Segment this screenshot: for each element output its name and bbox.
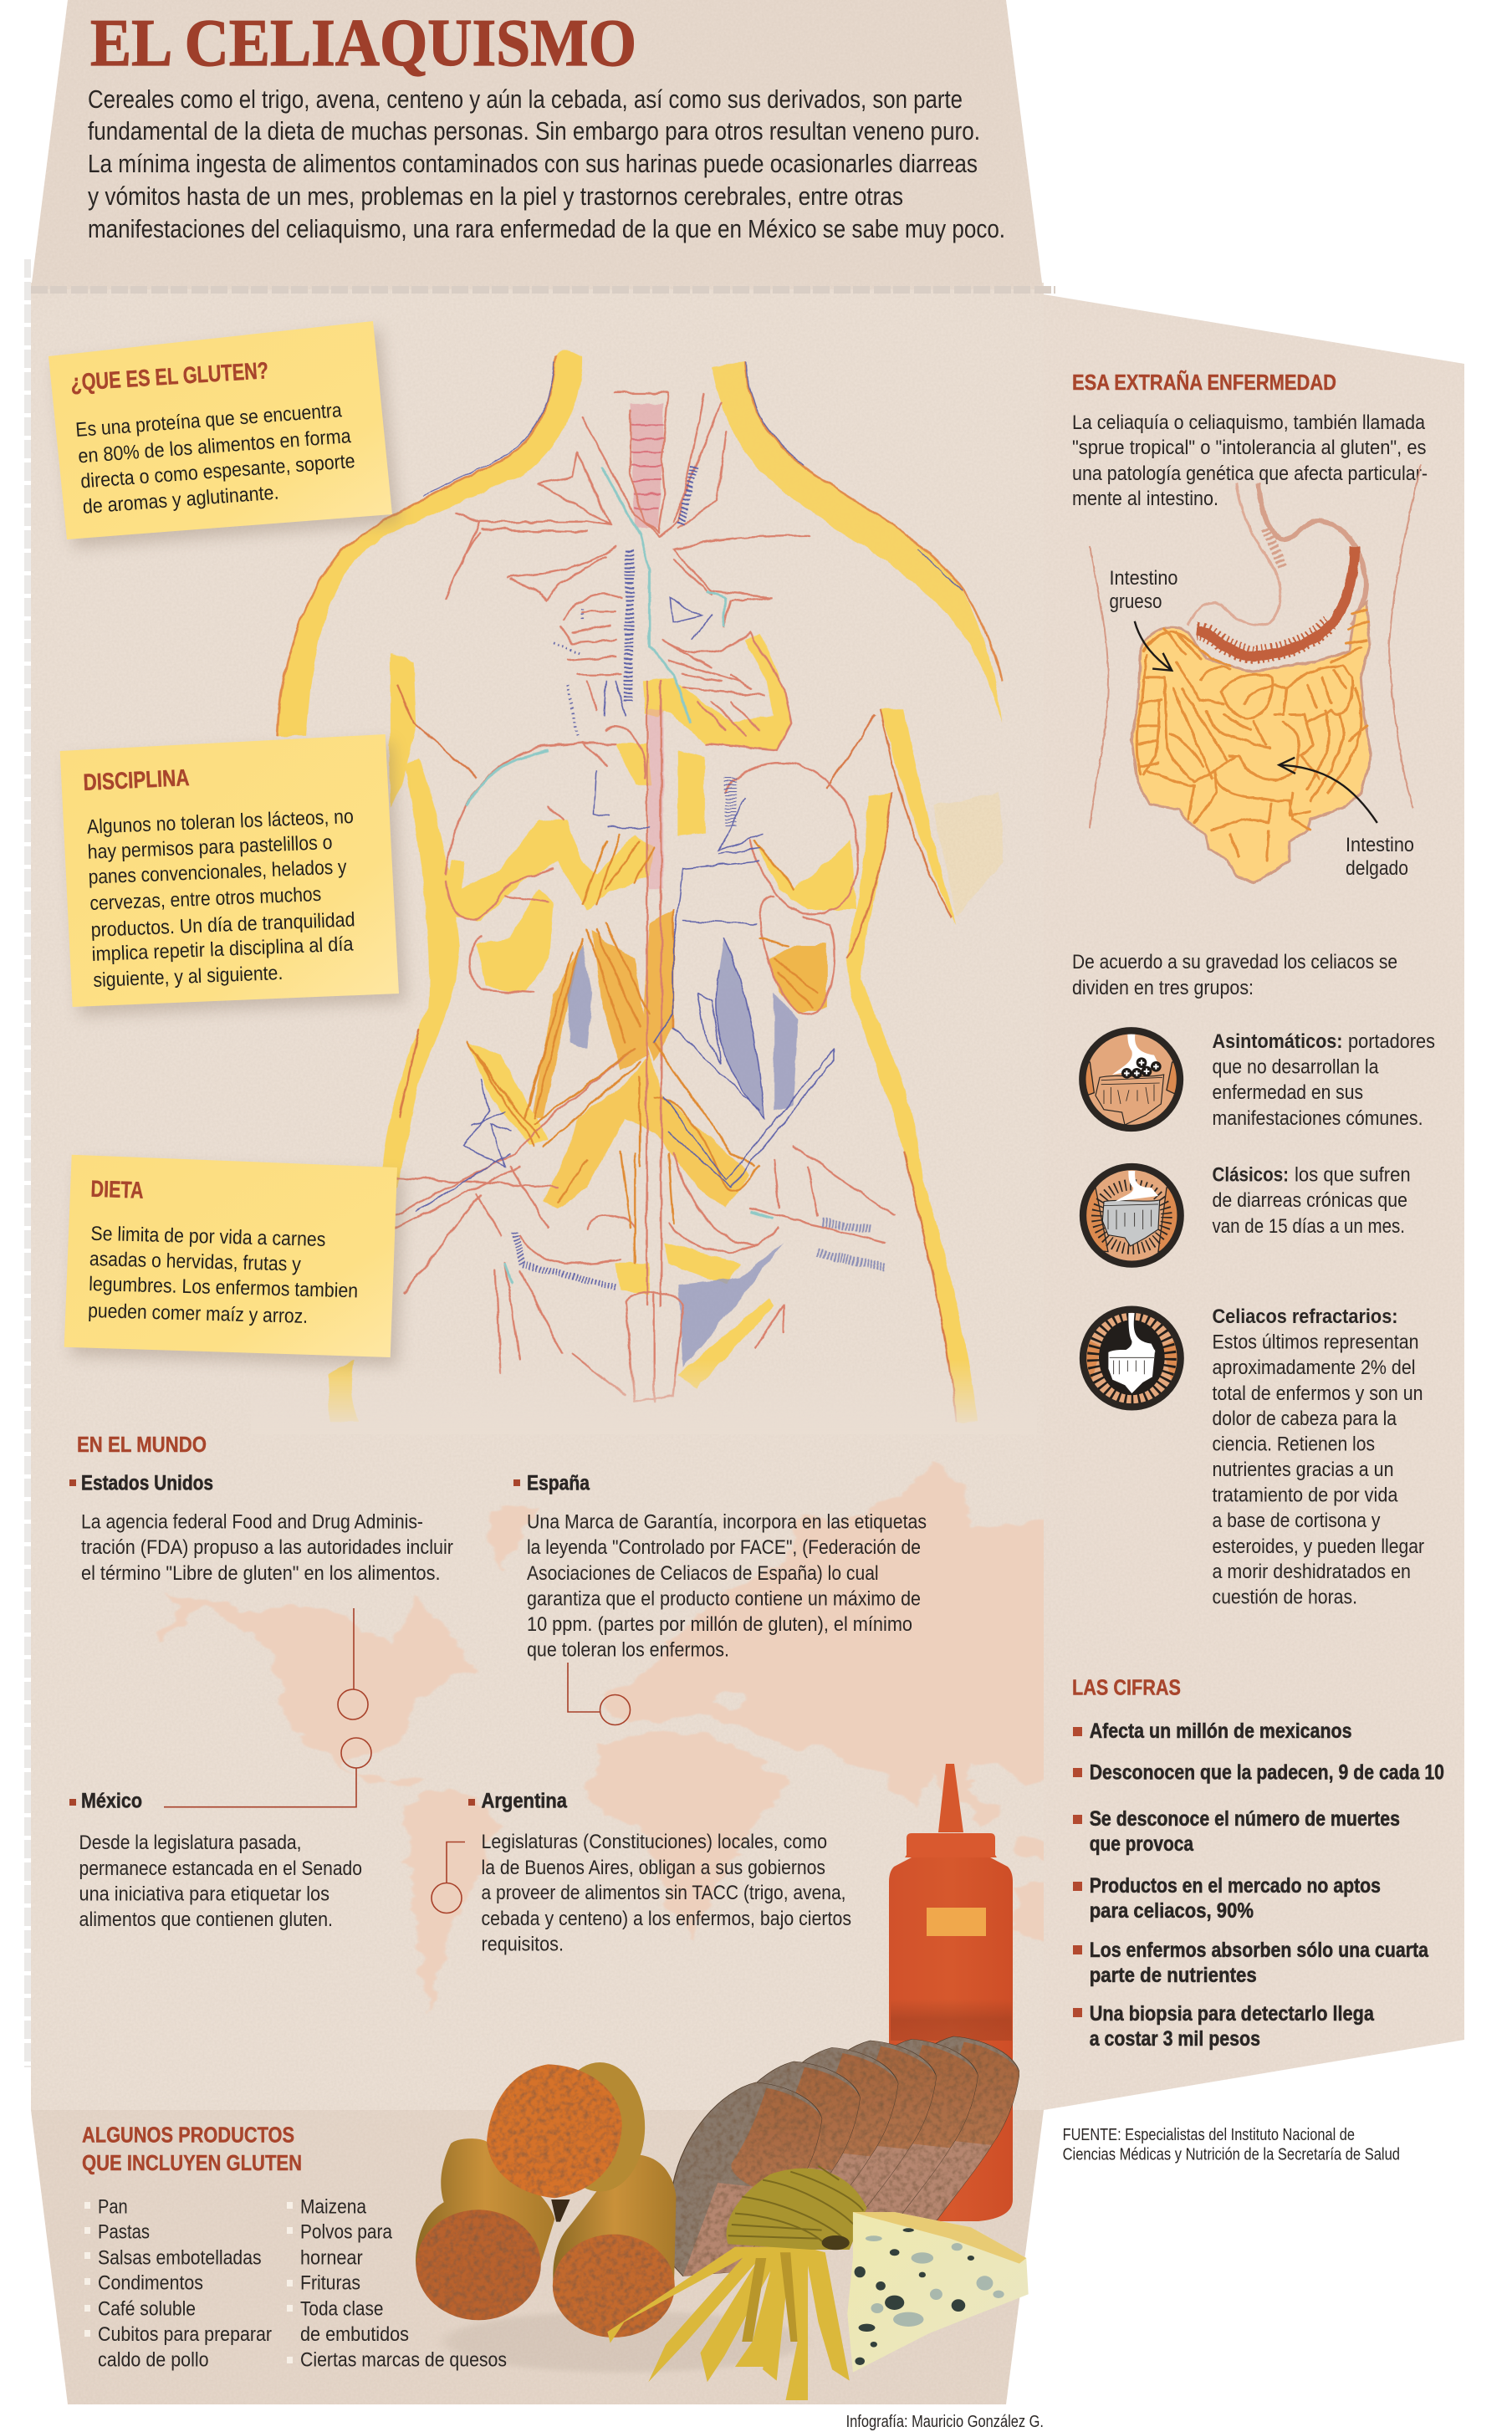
- label: intestino delgado: delgado: [1346, 857, 1408, 880]
- list column 1: Salsas embotelladas: [98, 2246, 262, 2269]
- text: celiacos refractarios: Estos últimos representan: [1213, 1331, 1418, 1353]
- blood vessels red lines: [395, 393, 894, 1402]
- stomach: [1188, 483, 1366, 657]
- label: intestino grueso: grueso: [1109, 590, 1162, 613]
- heading: ALGUNOS PRODUCTOS: [82, 2123, 294, 2148]
- méxico block: una iniciativa para etiquetar los: [79, 1883, 329, 1905]
- panel: right column: [1044, 294, 1464, 2110]
- perforated fold lines: [28, 259, 1055, 2067]
- figures list: Afecta un millón de mexicanos: [1090, 1719, 1351, 1743]
- text: celiacos refractarios: tratamiento de por vida: [1213, 1484, 1398, 1507]
- blue cheese wedge: [847, 2212, 1029, 2373]
- figures list: [1090, 1719, 1444, 2051]
- spine pink band: [648, 709, 664, 889]
- estados unidos block: el término "Libre de gluten" en los alimentos.: [81, 1562, 440, 1585]
- intro paragraph: La mínima ingesta de alimentos contaminados con sus harinas puede ocasionarles diarreas: [88, 149, 978, 178]
- body text: asadas o hervidas, frutas y: [89, 1248, 301, 1276]
- figures list: parte de nutrientes: [1090, 1964, 1257, 1987]
- map: north america: [160, 1592, 475, 1789]
- estados unidos block: [69, 1472, 453, 1585]
- text: asintomaticos: portadores: [1348, 1030, 1435, 1053]
- map: eurasia: [603, 1464, 1061, 1814]
- body text: hay permisos para pastelillos o: [87, 831, 333, 864]
- body text: [1072, 411, 1428, 510]
- méxico block: alimentos que contienen gluten.: [79, 1908, 333, 1931]
- argentina block: Argentina: [482, 1790, 568, 1813]
- bullet squares: [1073, 1727, 1082, 2017]
- note: disciplina: [60, 734, 399, 1007]
- icon: clasicos intestine: [1079, 1167, 1185, 1265]
- body text: [74, 399, 356, 519]
- panel: top flap: [31, 0, 1043, 289]
- body text: legumbres. Los enfermos tambien: [89, 1273, 358, 1302]
- estados unidos block: Estados Unidos: [81, 1472, 213, 1495]
- list column 1: Cubitos para preparar: [98, 2323, 272, 2346]
- map: south america: [402, 1792, 499, 2015]
- list column 2: hornear: [300, 2246, 363, 2269]
- text: celiacos refractarios: dolor de cabeza para la: [1213, 1408, 1397, 1430]
- figures list: Productos en el mercado no aptos: [1090, 1874, 1381, 1898]
- text: clasicos: van de 15 días a un mes.: [1213, 1215, 1405, 1238]
- body text: cervezas, entre otros muchos: [89, 883, 322, 915]
- groups intro text: dividen en tres grupos:: [1072, 977, 1254, 999]
- list column 2: Polvos para: [300, 2221, 393, 2244]
- intro paragraph: Cereales como el trigo, avena, centeno y aún la cebada, así como sus derivados, son parte: [88, 84, 963, 114]
- figures list: que provoca: [1090, 1832, 1194, 1856]
- argentina block: [468, 1790, 851, 1956]
- figures list: Se desconoce el número de muertes: [1090, 1807, 1400, 1831]
- map: africa: [586, 1731, 790, 1940]
- label: intestino grueso: Intestino: [1109, 567, 1177, 590]
- argentina block: Legislaturas (Constituciones) locales, como: [482, 1831, 827, 1853]
- nerves and veins blue: [416, 598, 834, 1212]
- text: asintomaticos: Asintomáticos:: [1213, 1030, 1343, 1053]
- source note: FUENTE: Especialistas del Instituto Nacional de: [1063, 2126, 1355, 2144]
- estados unidos block: tración (FDA) propuso a las autoridades incluir: [81, 1536, 453, 1559]
- title: EL CELIAQUISMO: [90, 7, 636, 80]
- argentina block: a proveer de alimentos sin TACC (trigo, avena,: [482, 1882, 846, 1904]
- españa block: la leyenda "Controlado por FACE", (Federación de: [527, 1536, 921, 1559]
- body text: "sprue tropical" o "intolerancia al gluten", es: [1072, 437, 1427, 459]
- figures list: Una biopsia para detectarlo llega: [1090, 2002, 1375, 2026]
- list column 1: Café soluble: [98, 2297, 196, 2320]
- blue hatching: [515, 467, 885, 1288]
- anatomical body illustration: [278, 350, 1004, 1422]
- españa block: Una Marca de Garantía, incorpora en las etiquetas: [527, 1511, 927, 1534]
- méxico block: Desde la legislatura pasada,: [79, 1832, 301, 1854]
- text: celiacos refractarios: cuestión de horas.: [1213, 1586, 1357, 1609]
- text: celiacos refractarios: a base de cortisona y: [1213, 1510, 1380, 1532]
- españa block: que toleran los enfermos.: [527, 1639, 729, 1662]
- list column 2: de embutidos: [300, 2323, 409, 2346]
- list column 1: Condimentos: [98, 2272, 203, 2295]
- author credit: Infografía: Mauricio González G.: [846, 2413, 1044, 2431]
- text: asintomaticos: [1213, 1030, 1435, 1130]
- body text: Algunos no toleran los lácteos, no: [86, 805, 354, 839]
- españa block: garantiza que el producto contiene un máximo de: [527, 1587, 921, 1610]
- note shadows: [55, 330, 406, 1366]
- text: celiacos refractarios: nutrientes gracias a un: [1213, 1459, 1393, 1481]
- trachea: [630, 404, 664, 529]
- body text: una patología genética que afecta particular-: [1072, 462, 1428, 485]
- text: celiacos refractarios: ciencia. Retienen los: [1213, 1433, 1375, 1456]
- body text: Se limita de por vida a carnes: [90, 1223, 326, 1251]
- españa block: [513, 1472, 927, 1662]
- note: que es el gluten: [49, 321, 392, 539]
- note: dieta: [64, 1155, 397, 1357]
- teal vessels: [467, 467, 774, 1285]
- body text: implica repetir la disciplina al día: [91, 932, 355, 966]
- text: celiacos refractarios: Celiacos refractarios:: [1213, 1305, 1398, 1328]
- heading: QUE INCLUYEN GLUTEN: [82, 2150, 302, 2175]
- intestine illustration: [1090, 464, 1421, 882]
- body text: mente al intestino.: [1072, 488, 1218, 510]
- list column 2: Frituras: [300, 2272, 360, 2295]
- body text: pueden comer maíz y arroz.: [88, 1300, 308, 1328]
- panel: bottom flap: [31, 2110, 1044, 2404]
- intro paragraph: y vómitos hasta de un mes, problemas en la piel y trastornos cerebrales, entre otras: [88, 181, 903, 211]
- body outline rims: [278, 355, 1002, 1422]
- heading: LAS CIFRAS: [1072, 1675, 1181, 1700]
- figures list: Desconocen que la padecen, 9 de cada 10: [1090, 1761, 1444, 1785]
- intestine folds: [1137, 610, 1368, 861]
- text: clasicos: [1213, 1164, 1411, 1238]
- argentina block: la de Buenos Aires, obligan a sus gobiernos: [482, 1857, 825, 1879]
- section: algunos productos: [82, 2123, 507, 2371]
- body text: en 80% de los alimentos en forma: [77, 425, 352, 467]
- source note: [1063, 2126, 1400, 2164]
- intro paragraph: [88, 84, 1005, 243]
- heading: [82, 2123, 302, 2175]
- list column 2: Toda clase: [300, 2297, 383, 2320]
- section: esa extraña enfermedad: [1072, 370, 1428, 510]
- list column 2: Ciertas marcas de quesos: [300, 2348, 507, 2371]
- icon: asintomaticos intestine: [1079, 1030, 1185, 1128]
- section: las cifras: [1072, 1675, 1444, 2051]
- figures list: para celiacos, 90%: [1090, 1899, 1254, 1923]
- text: clasicos: de diarreas crónicas que: [1213, 1189, 1407, 1212]
- figures list: a costar 3 mil pesos: [1090, 2027, 1260, 2051]
- body text: panes convencionales, helados y: [88, 856, 347, 889]
- méxico block: México: [81, 1790, 142, 1813]
- bread slices: [672, 2036, 1019, 2276]
- body text: productos. Un día de tranquilidad: [90, 908, 355, 942]
- argentina block: cebada y centeno) a los enfermos, bajo ciertos: [482, 1908, 851, 1930]
- torso outline: [1090, 464, 1421, 829]
- organs yellow washes: [445, 632, 856, 1388]
- arrow: intestino grueso: [1135, 621, 1172, 671]
- body text: La celiaquía o celiaquismo, también llamada: [1072, 411, 1426, 434]
- heading: DIETA: [90, 1176, 144, 1203]
- icon: refractarios intestine: [1079, 1310, 1185, 1407]
- intro paragraph: fundamental de la dieta de muchas personas. Sin embargo para otros resultan veneno puro.: [88, 116, 980, 146]
- españa block: 10 ppm. (partes por millón de gluten), el mínimo: [527, 1613, 912, 1636]
- méxico block: [69, 1790, 362, 1931]
- méxico block: permanece estancada en el Senado: [79, 1857, 362, 1880]
- text: asintomaticos: manifestaciones cómunes.: [1213, 1107, 1423, 1130]
- text: celiacos refractarios: [1213, 1305, 1424, 1609]
- heading: DISCIPLINA: [83, 764, 190, 795]
- text: clasicos: Clásicos:: [1213, 1164, 1289, 1186]
- sausages: [416, 2062, 676, 2337]
- body text: [86, 805, 355, 992]
- list column 2: Maizena: [300, 2196, 367, 2219]
- intestine mass: [1131, 603, 1372, 882]
- map: oceania: [972, 1803, 1044, 1942]
- españa block: España: [527, 1472, 590, 1495]
- body text: de aromas y aglutinante.: [82, 481, 279, 519]
- text: celiacos refractarios: aproximadamente 2% del: [1213, 1357, 1415, 1379]
- world map: [160, 1464, 1061, 2015]
- argentina block: requisitos.: [482, 1934, 564, 1956]
- list column 1: Pan: [98, 2196, 128, 2219]
- ground shadow: [444, 2311, 805, 2373]
- body outline yellow bands: [278, 350, 1004, 1422]
- source note: Ciencias Médicas y Nutrición de la Secretaría de Salud: [1063, 2146, 1400, 2164]
- food photographs: [416, 2036, 1029, 2400]
- text: celiacos refractarios: total de enfermos y son un: [1213, 1382, 1423, 1405]
- orange anatomical lines: [467, 834, 817, 1264]
- arrow: intestino delgado: [1279, 758, 1377, 823]
- bottle label: [927, 1908, 986, 1936]
- españa block: Asociaciones de Celiacos de España) lo cual: [527, 1562, 879, 1585]
- heading: ¿QUE ES EL GLUTEN?: [69, 357, 269, 396]
- text: asintomaticos: enfermedad en sus: [1213, 1081, 1363, 1104]
- text: asintomaticos: que no desarrollan la: [1213, 1056, 1379, 1079]
- list column 1: Pastas: [98, 2221, 150, 2244]
- body bottom fade: [251, 1359, 1037, 1434]
- body text: Es una proteína que se encuentra: [74, 399, 343, 442]
- list column 1: caldo de pollo: [98, 2348, 209, 2371]
- body text: siguiente, y al siguiente.: [93, 962, 284, 992]
- figures list: Los enfermos absorben sólo una cuarta: [1090, 1939, 1429, 1962]
- text: clasicos: los que sufren: [1295, 1164, 1411, 1186]
- label: intestino delgado: Intestino: [1346, 834, 1414, 856]
- heading: EN EL MUNDO: [77, 1432, 207, 1457]
- map: greenland: [485, 1507, 534, 1571]
- map callout lines: [164, 1608, 631, 1913]
- text: celiacos refractarios: esteroides, y pueden llegar: [1213, 1535, 1424, 1558]
- groups intro text: [1072, 951, 1397, 999]
- intro paragraph: manifestaciones del celiaquismo, una rara enfermedad de la que en México se sabe muy poco.: [88, 214, 1005, 243]
- list column 1: [84, 2196, 272, 2371]
- muscles blue wash: [568, 938, 798, 1367]
- body text: directa o como espesante, soporte: [79, 450, 356, 493]
- label: intestino grueso: [1109, 567, 1177, 613]
- label: intestino delgado: [1346, 834, 1414, 880]
- estados unidos block: La agencia federal Food and Drug Adminis-: [81, 1511, 423, 1534]
- heading: ESA EXTRAÑA ENFERMEDAD: [1072, 370, 1336, 395]
- list column 2: [287, 2196, 507, 2371]
- pasta nest: [607, 2166, 866, 2400]
- bottle: [889, 1764, 1013, 2221]
- text: celiacos refractarios: a morir deshidratados en: [1213, 1561, 1411, 1583]
- groups intro text: De acuerdo a su gravedad los celiacos se: [1072, 951, 1397, 973]
- body text: [88, 1223, 358, 1328]
- section: en el mundo: [69, 1432, 927, 1956]
